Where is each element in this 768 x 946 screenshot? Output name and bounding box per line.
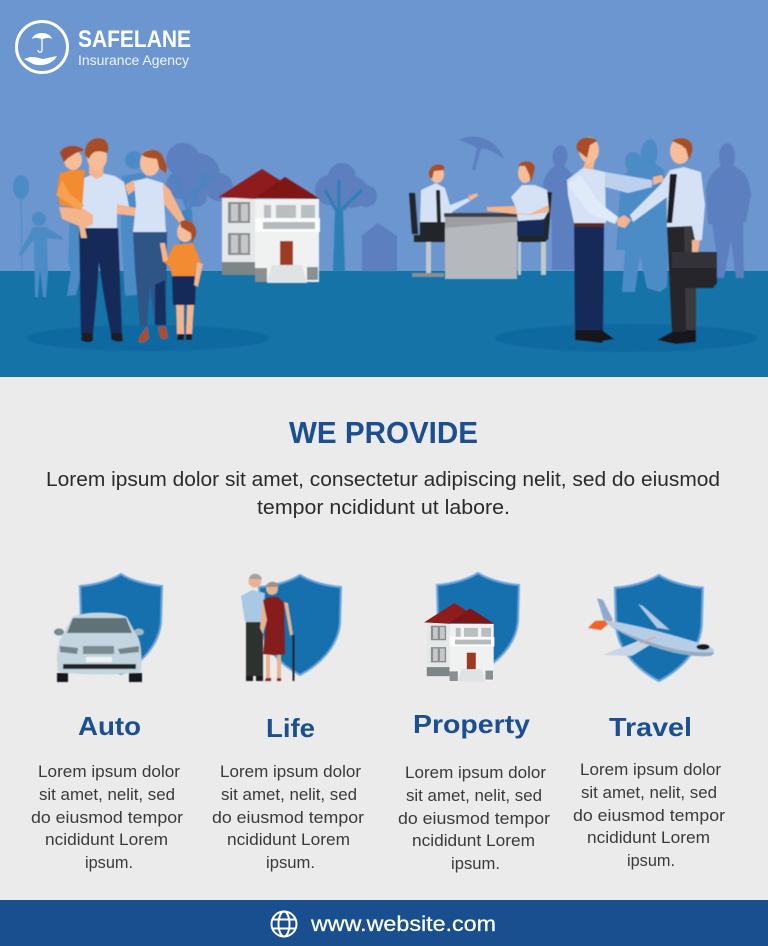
brand tagline: Insurance Agency [78, 52, 189, 68]
seated man with chair [409, 164, 478, 277]
hero ground [0, 271, 768, 377]
label: auto: Auto [78, 711, 141, 741]
travel description [573, 761, 726, 870]
life description [212, 763, 365, 872]
people silhouettes, right [543, 139, 751, 292]
travel description: sit amet, nelit, sed [581, 784, 717, 802]
background silhouettes, left [13, 151, 146, 297]
tree, right [315, 163, 377, 271]
heading: we provide: WE PROVIDE [289, 415, 478, 450]
service: travel [573, 575, 726, 870]
life description: sit amet, nelit, sed [221, 786, 357, 804]
icon: elderly couple [241, 574, 294, 681]
background house silhouette [360, 223, 397, 271]
life description: do eiusmod tempor [212, 809, 365, 827]
tree, left [166, 143, 233, 271]
footer bar [0, 900, 768, 946]
desk [444, 213, 519, 279]
label: travel: Travel [609, 712, 692, 742]
service: auto [31, 574, 184, 872]
logo emblem [16, 22, 68, 72]
icon: house [424, 603, 494, 682]
seated client with chair [487, 161, 552, 275]
auto description: do eiusmod tempor [31, 809, 184, 827]
icon: car [54, 612, 144, 682]
service: life [212, 574, 365, 872]
hero sky [0, 0, 768, 272]
hero illustration [13, 136, 757, 352]
website address: www.website.com [310, 913, 496, 936]
brand name: SAFELANE [78, 26, 191, 53]
auto shield [80, 574, 162, 674]
intro paragraph: Lorem ipsum dolor sit amet, consectetur adipiscing nelit, sed do eiusmod [46, 469, 720, 491]
house illustration [218, 169, 320, 283]
family: girl [56, 146, 93, 238]
property shield [437, 573, 519, 673]
family: man [79, 138, 136, 342]
intro paragraph [46, 469, 720, 519]
life description: Lorem ipsum dolor [220, 763, 362, 781]
travel description: Lorem ipsum dolor [580, 761, 722, 779]
travel description: do eiusmod tempor [573, 807, 726, 825]
label: life: Life [266, 713, 315, 743]
life shield [259, 575, 341, 675]
travel description: ipsum. [627, 852, 675, 870]
handshake: right businessman [616, 138, 717, 344]
property description [398, 764, 551, 873]
auto description: ipsum. [85, 854, 133, 872]
property description: sit amet, nelit, sed [406, 787, 542, 805]
icon: globe [272, 912, 296, 936]
icon: airplane [588, 598, 714, 656]
auto description: sit amet, nelit, sed [39, 786, 175, 804]
property description: Lorem ipsum dolor [405, 764, 547, 782]
handshake: left businessman [567, 137, 664, 343]
service: property [398, 573, 551, 873]
business ground shadow [495, 324, 757, 352]
family ground shadow [27, 325, 269, 351]
auto description [31, 763, 184, 872]
travel description: ncididunt Lorem [587, 829, 710, 847]
travel shield [615, 575, 703, 681]
life description: ipsum. [266, 854, 315, 872]
life description: ncididunt Lorem [227, 831, 350, 849]
property description: ncididunt Lorem [412, 832, 535, 850]
family: boy [160, 220, 203, 340]
umbrella silhouette [459, 136, 504, 170]
logo [16, 22, 191, 72]
auto description: ncididunt Lorem [45, 831, 168, 849]
property description: ipsum. [451, 855, 500, 873]
property description: do eiusmod tempor [398, 810, 551, 828]
label: property: Property [413, 709, 531, 739]
family: woman [125, 150, 186, 342]
auto description: Lorem ipsum dolor [38, 763, 181, 781]
intro paragraph: tempor ncididunt ut labore. [257, 497, 510, 519]
